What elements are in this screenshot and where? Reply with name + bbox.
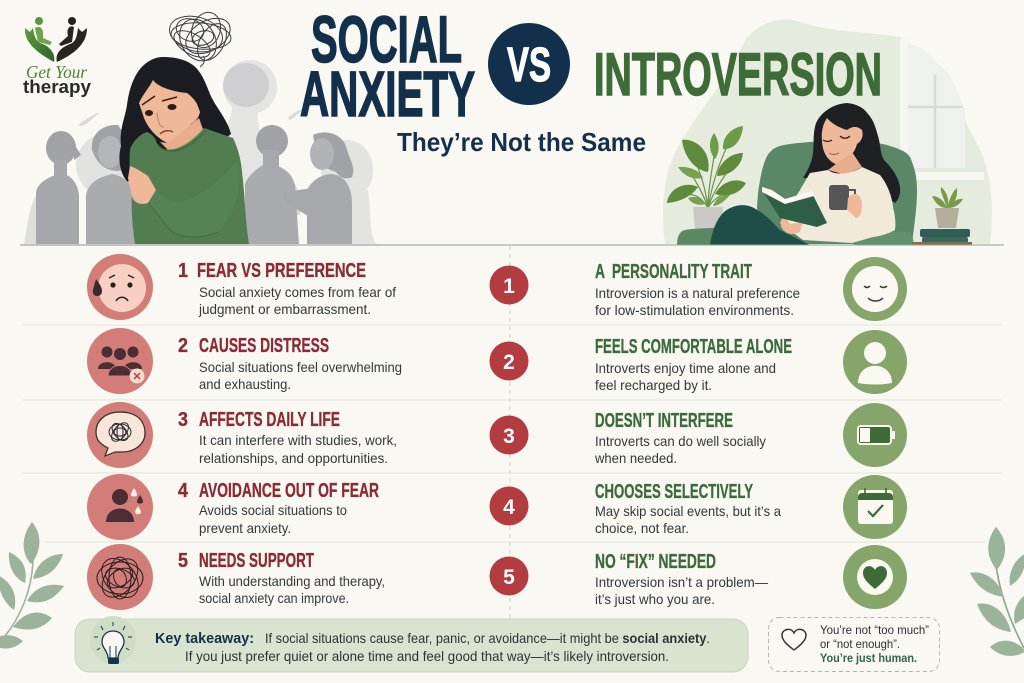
icon: light bulb (90, 616, 136, 664)
row 2: causes distress: and exhausting. (199, 377, 291, 392)
row 1: fear vs preference (87, 254, 396, 320)
row 2: causes distress: CAUSES DISTRESS (199, 334, 329, 357)
centre number badges: 4 (503, 496, 515, 519)
row 5: no fix needed: NO “FIX” NEEDED (595, 550, 716, 573)
row 3: doesn't interfere (594, 403, 907, 467)
row 5: needs support: social anxiety can improve. (199, 591, 349, 606)
row 1: a personality trait (595, 257, 907, 321)
reassurance note: You’re not “too much” (820, 624, 929, 637)
row 5: needs support: 5 (178, 549, 188, 572)
key takeaway panel: Key takeaway: (155, 631, 254, 647)
reassurance note: or “not enough”. (820, 638, 900, 651)
gray figure: woman right (307, 174, 352, 244)
row 2: feels comfortable alone: Introverts enjoy time alone and (595, 361, 776, 376)
row 2: feels comfortable alone (595, 330, 907, 394)
key takeaway panel: If you just prefer quiet or alone time and feel good that way—it’s likely introversion. (185, 649, 669, 664)
gray figure: man left (36, 173, 79, 244)
row 1: fear vs preference: judgment or embarrassment. (198, 302, 371, 317)
illustration: small plant on books (912, 187, 972, 245)
centre number badges: 2 (503, 351, 515, 374)
vs badge (488, 23, 570, 105)
panel: introversion rows (594, 257, 907, 609)
row 4: avoidance out of fear (87, 474, 379, 540)
row 4: avoidance out of fear: Avoids social situations to (199, 503, 347, 518)
row 1: a personality trait: PERSONALITY TRAIT (612, 260, 752, 283)
title: Social Anxiety: ANXIETY (300, 58, 475, 130)
row 5: no fix needed: Introversion isn’t a problem— (595, 575, 768, 590)
reassurance note: You’re just human. (820, 652, 917, 665)
row 3: doesn't interfere: when needed. (594, 451, 677, 466)
row 4: avoidance out of fear: AVOIDANCE OUT OF FEAR (199, 479, 379, 502)
title: Social Anxiety (300, 2, 475, 130)
panel: social anxiety rows (87, 254, 402, 610)
row 4: avoidance out of fear: 4 (178, 479, 189, 502)
key takeaway panel (75, 616, 748, 672)
row 3: affects daily life: AFFECTS DAILY LIFE (199, 408, 340, 431)
row 5: no fix needed (595, 545, 907, 609)
row 4: chooses selectively: choice, not fear. (595, 521, 689, 536)
row 2: feels comfortable alone: FEELS COMFORTABLE ALONE (595, 335, 792, 358)
row 3: affects daily life: It can interfere with studies, work, (199, 433, 397, 448)
illustration: potted plant (667, 126, 746, 229)
row 3: affects daily life: relationships, and opportunities. (199, 451, 388, 466)
row dividers and central dashed line (22, 246, 1002, 620)
row 4: chooses selectively: CHOOSES SELECTIVELY (595, 480, 753, 503)
centre number badges: 5 (503, 566, 515, 589)
row 2: causes distress: Social situations feel overwhelming (199, 360, 402, 375)
row 2: feels comfortable alone: feel recharged by it. (595, 378, 712, 393)
gray figure: man right (245, 165, 299, 244)
row 4: avoidance out of fear: prevent anxiety. (199, 521, 291, 536)
row 3: affects daily life (87, 402, 397, 468)
row 1: a personality trait: A (595, 260, 605, 283)
row 1: a personality trait: for low-stimulation environments. (595, 303, 794, 318)
illustration: anxious woman in green sweater (119, 57, 249, 244)
illustration: armchair (677, 141, 917, 245)
row 3: doesn't interfere: DOESN’T INTERFERE (595, 409, 733, 432)
row 2: causes distress (87, 328, 402, 394)
centre number badges: 1 (503, 275, 515, 298)
row 5: needs support: With understanding and therapy, (199, 574, 385, 589)
centre number badges: 3 (503, 425, 515, 448)
row 4: chooses selectively: May skip social events, but it’s a (595, 504, 781, 519)
key takeaway panel: If social situations cause fear, panic, or avoidance—it might be social anxiety. (265, 631, 710, 646)
subtitle: They’re Not the Same (397, 127, 646, 157)
decoration: left leaf sprig (0, 522, 64, 649)
row 3: doesn't interfere: Introverts can do well socially (595, 434, 766, 449)
row 1: a personality trait: Introversion is a natural preference (595, 286, 800, 301)
row 1: fear vs preference: 1 (178, 259, 188, 282)
header divider (20, 244, 1004, 246)
row 5: no fix needed: it’s just who you are. (595, 592, 715, 607)
illustration: blurred crowd behind anxious woman (24, 60, 376, 244)
centre number badges (490, 266, 528, 596)
row 1: fear vs preference: Social anxiety comes from fear of (199, 285, 396, 300)
illustration: calm room backdrop with window (663, 19, 992, 244)
icon: outline heart (782, 629, 806, 650)
row 2: causes distress: 2 (178, 334, 188, 357)
title: Social Anxiety: SOCIAL (311, 2, 462, 76)
gray figure: woman left (86, 174, 136, 244)
row 4: chooses selectively (595, 475, 907, 539)
vs badge: VS (507, 39, 551, 92)
scribble thought above head (166, 8, 236, 68)
row 1: fear vs preference: FEAR VS PREFERENCE (197, 259, 366, 282)
row 5: needs support (87, 544, 385, 610)
illustration: woman reading with mug (710, 103, 900, 245)
reassurance note (768, 618, 940, 672)
decoration: right leaf sprig (970, 527, 1024, 656)
logo: Get Your Therapy: therapy (23, 76, 92, 97)
row 5: needs support: NEEDS SUPPORT (199, 549, 314, 572)
logo: Get Your Therapy (23, 17, 92, 97)
logo: Get Your Therapy: Get Your (26, 62, 87, 82)
row 3: affects daily life: 3 (178, 408, 188, 431)
